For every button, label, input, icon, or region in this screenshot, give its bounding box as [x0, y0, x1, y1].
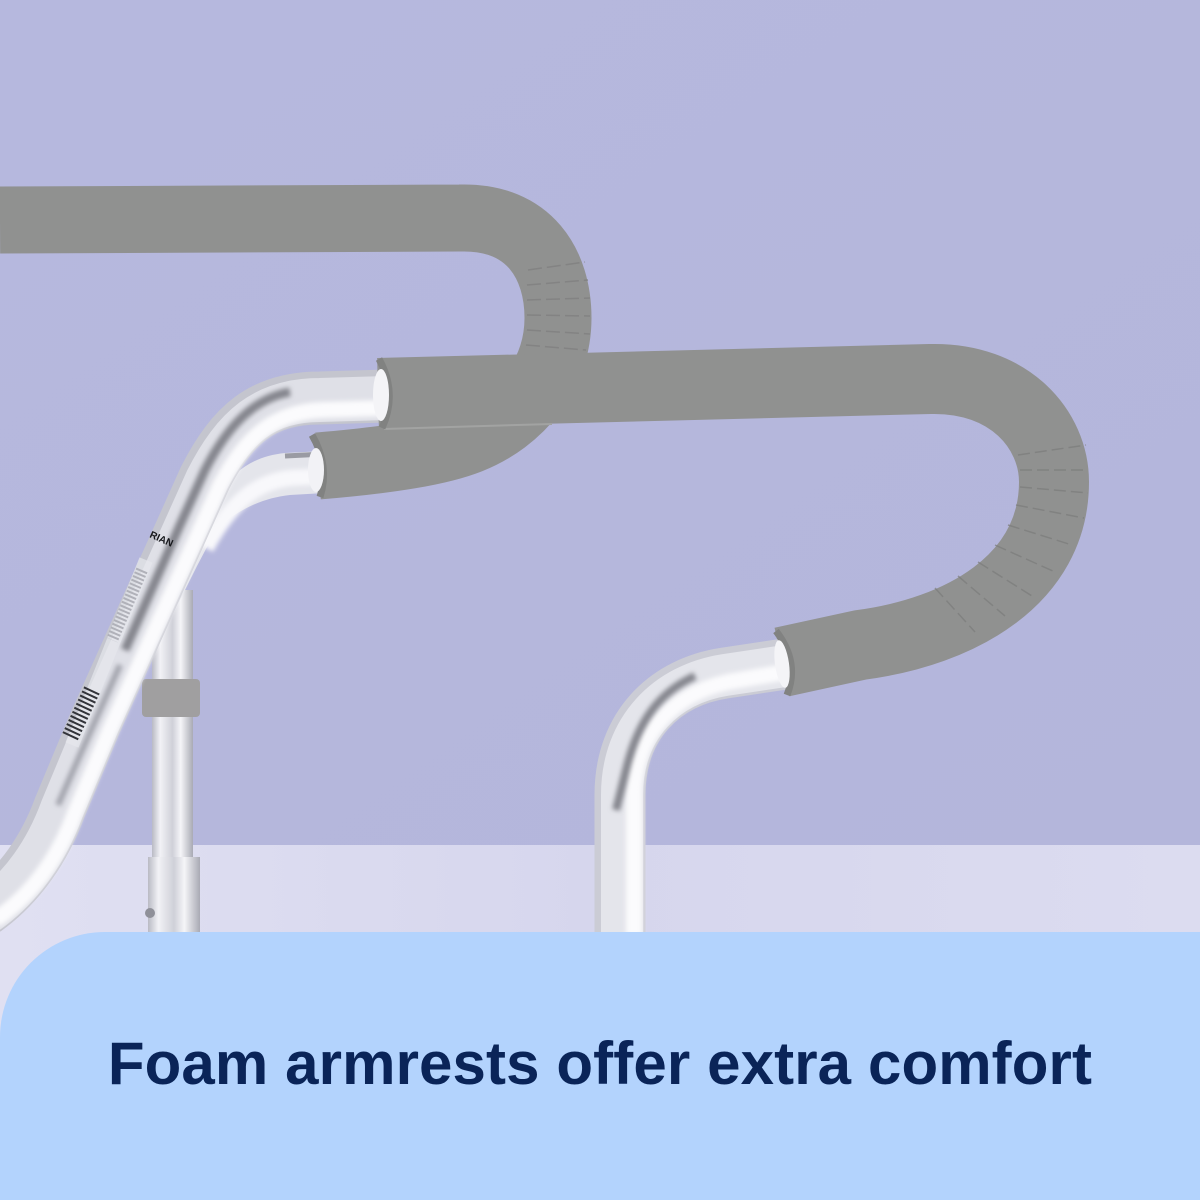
back metal tube	[170, 451, 325, 620]
back tube end	[308, 448, 324, 492]
front right foam end rim	[776, 631, 792, 695]
front right tube end	[772, 639, 792, 689]
foam wrinkles	[935, 445, 1088, 632]
front left metal tube	[0, 392, 385, 920]
front tube end	[373, 369, 389, 421]
tube label with barcode: RIAN	[148, 530, 175, 550]
back vertical post	[142, 590, 200, 935]
floor	[0, 845, 1200, 1200]
back foam armrest	[0, 218, 590, 466]
heading: Foam armrests offer extra comfort	[108, 1030, 1092, 1097]
caption panel	[0, 932, 1200, 1200]
wall background	[0, 0, 1200, 845]
back armrest end rim	[312, 435, 324, 497]
front right metal tube	[616, 664, 785, 935]
front foam armrest	[378, 379, 1054, 662]
tube label with barcode	[70, 530, 175, 745]
front foam end rim	[379, 359, 389, 428]
front foam lower edge highlight	[384, 424, 552, 429]
